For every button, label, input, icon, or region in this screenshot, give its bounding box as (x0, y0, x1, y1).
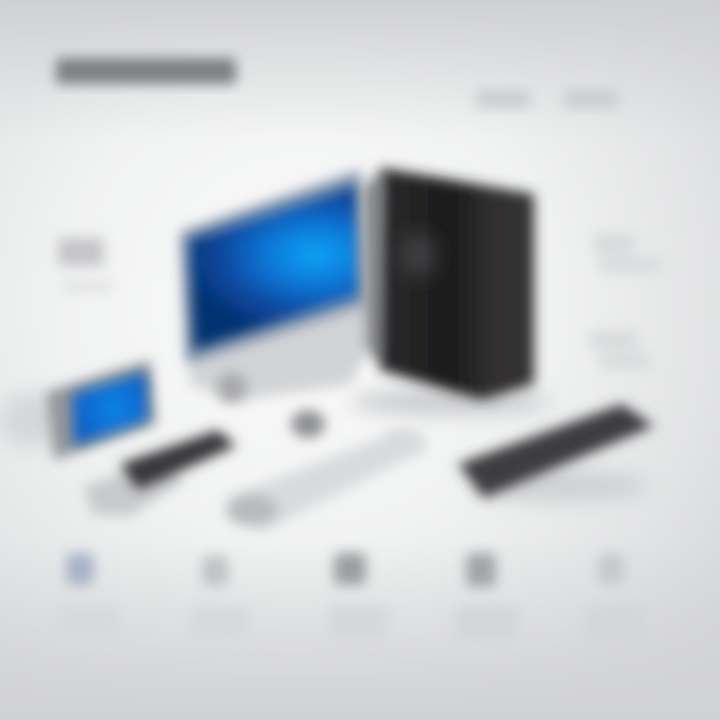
floor shadows (0, 390, 650, 502)
tower front (380, 168, 534, 400)
feature 1 (56, 553, 120, 640)
bottom features row (56, 553, 645, 640)
white keyboard small (84, 462, 185, 516)
tablet (46, 360, 156, 460)
title (56, 58, 236, 84)
tower highlight (400, 233, 436, 277)
feature 4 (455, 553, 517, 640)
monitor stand (190, 300, 425, 450)
dark remote (120, 430, 236, 490)
right side labels (590, 234, 660, 368)
feature 3 (328, 553, 388, 640)
left side label (58, 238, 112, 292)
tower computer (362, 168, 534, 400)
monitor (180, 170, 425, 450)
tower side (362, 168, 384, 365)
monitor frame (180, 170, 368, 364)
monitor screen (190, 186, 358, 350)
dark keyboard (458, 404, 654, 498)
white keyboard large (226, 430, 428, 532)
feature 2 (190, 556, 250, 640)
top right labels (476, 90, 618, 108)
feature 5 (585, 554, 645, 640)
